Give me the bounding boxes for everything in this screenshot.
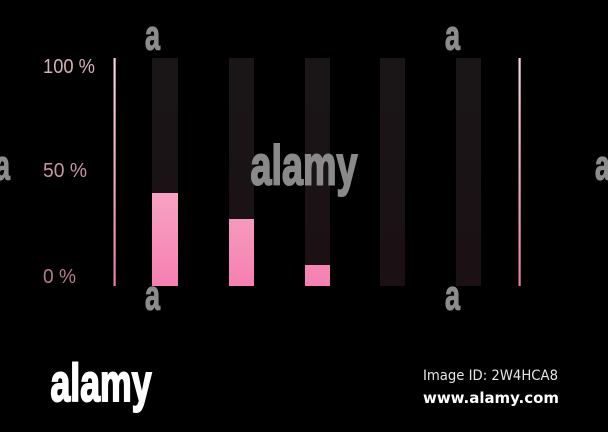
label: 0 %: 0 % <box>43 266 76 288</box>
label: 50 %: 50 % <box>43 160 87 182</box>
label: 100 %: 100 % <box>43 56 95 78</box>
left axis line <box>114 58 116 286</box>
axis labels <box>43 56 95 288</box>
watermark a bottom right: a <box>445 272 460 318</box>
bar 3 <box>305 58 330 286</box>
watermark a bottom left: a <box>145 272 160 318</box>
watermark a top left: a <box>145 12 160 58</box>
bar 4 <box>380 58 405 286</box>
bar 1 <box>152 58 178 286</box>
alamy logo: alamy <box>50 354 152 413</box>
watermark a top right: a <box>445 12 460 58</box>
watermark letters <box>0 12 608 318</box>
bar 2 <box>229 58 254 286</box>
right axis line <box>518 58 521 286</box>
central watermark: alamy <box>250 134 358 196</box>
image id: Image ID: 2W4HCA8 <box>423 368 558 384</box>
bar 5 <box>456 58 481 286</box>
website url: www.alamy.com <box>423 389 559 407</box>
